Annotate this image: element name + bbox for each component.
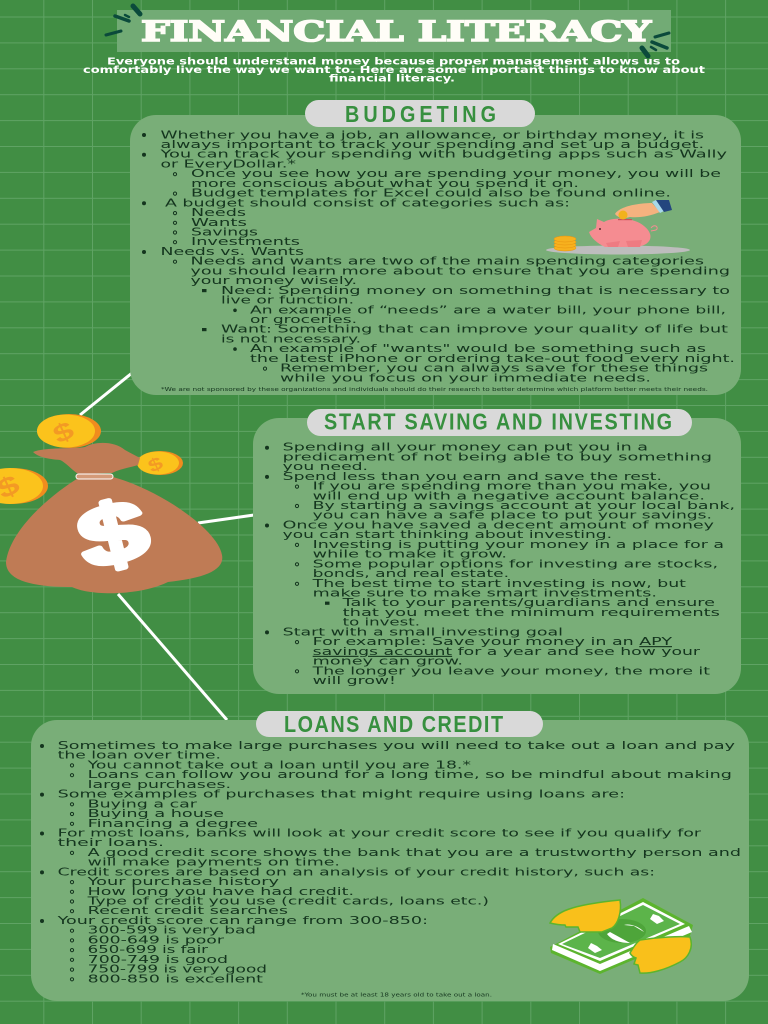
budgeting text: your money wisely.	[190, 274, 357, 287]
bag tie	[76, 474, 113, 479]
saving text: The longer you leave your money, the more it	[311, 664, 711, 677]
loans text: 650-699 is fair	[88, 943, 209, 956]
budgeting text: more conscious about what you spend it on.	[191, 177, 579, 190]
budgeting text: you should learn more about to ensure that you are spending	[190, 264, 730, 277]
icon: money with wings	[550, 898, 693, 974]
intro text	[83, 56, 706, 84]
saving text: you need.	[283, 460, 368, 473]
title banner: FINANCIAL LITERACY	[141, 15, 652, 48]
saving text: The best time to start investing is now, but	[311, 577, 687, 590]
budgeting footnote: *We are not sponsored by these organizations and individuals should do their research to better determine which platform better meets their needs.	[161, 387, 709, 393]
saving text: you can have a safe place to put your savings.	[313, 509, 712, 522]
saving text: that you meet the minimum requirements	[343, 606, 720, 619]
loans text	[56, 739, 741, 985]
bag top	[33, 443, 140, 474]
loans text: their loans.	[58, 836, 164, 849]
saving text: By starting a savings account at your local bank,	[313, 499, 735, 512]
loans text: You cannot take out a loan until you are 18.*	[86, 758, 472, 771]
loans text: 300-599 is very bad	[88, 924, 256, 937]
saving text: will grow!	[313, 674, 396, 687]
loans text: Buying a car	[88, 797, 198, 810]
loans text: Type of credit you use (credit cards, loans etc.)	[86, 894, 489, 908]
budgeting bullet markers	[142, 133, 267, 370]
coin top	[37, 414, 101, 449]
panel: start saving and investing	[253, 418, 741, 694]
saving text: Some popular options for investing are stocks,	[313, 557, 718, 570]
saving text: Spending all your money can put you in a	[283, 441, 648, 454]
intro text: comfortably live the way we want to. Here are some important things to know about	[83, 65, 706, 76]
intro text: Everyone should understand money because proper management allows us to	[107, 56, 681, 68]
loans text: Recent credit searches	[88, 904, 288, 917]
loans text: For most loans, banks will look at your credit score to see if you qualify for	[58, 826, 702, 840]
budgeting text: Investments	[191, 235, 300, 248]
saving text	[283, 441, 735, 687]
coin right	[137, 451, 183, 477]
loans text: A good credit score shows the bank that you are a trustworthy person and	[88, 846, 741, 859]
saving text: Start with a small investing goal	[283, 625, 563, 638]
loans text: large purchases.	[88, 778, 231, 791]
loans text: 750-799 is very good	[88, 963, 267, 976]
saving text: bonds, and real estate.	[313, 567, 509, 580]
saving text: Spend less than you earn and save the rest.	[283, 470, 662, 483]
heading: start saving and investing: START SAVING AND INVESTING	[324, 409, 672, 435]
saving text: savings account for a year and see how your	[313, 645, 701, 658]
budgeting text: Wants	[191, 216, 247, 229]
budgeting text: You can track your spending with budgeting apps such as Wally	[159, 148, 728, 161]
saving text: will end up with a negative account balance.	[313, 489, 705, 502]
title banner	[117, 10, 671, 52]
intro text: financial literacy.	[329, 74, 455, 84]
saving text: money can grow.	[313, 654, 463, 668]
budgeting text: A budget should consist of categories such as:	[165, 196, 570, 209]
panel: loans and credit	[31, 720, 749, 1001]
budgeting text: Whether you have a job, an allowance, or birthday money, it is	[160, 128, 704, 141]
loans text: will make payments on time.	[88, 856, 340, 869]
saving text: For example: Save your money in an APY	[313, 635, 672, 648]
budgeting text: Remember, you can always save for these things	[280, 362, 708, 375]
saving bullet markers	[265, 446, 330, 673]
budgeting text	[159, 128, 735, 384]
budgeting text: An example of "wants" would be something such as	[250, 342, 706, 355]
loans text: Your credit score can range from 300-850:	[56, 914, 428, 927]
budgeting text: or EveryDollar.*	[160, 158, 297, 170]
coin right: $	[145, 452, 166, 477]
coin top: $	[49, 416, 78, 449]
budgeting text: An example of “needs” are a water bill, your phone bill,	[250, 303, 726, 316]
loans text: How long you have had credit.	[88, 885, 354, 898]
heading: budgeting	[305, 100, 535, 127]
budgeting text: Needs	[191, 206, 246, 219]
loans text: Credit scores are based on an analysis of your credit history, such as:	[58, 865, 655, 878]
loans text: the loan over time.	[58, 749, 221, 762]
heading: loans and credit: LOANS AND CREDIT	[284, 712, 503, 737]
icon: sparkles bottom right	[642, 33, 669, 56]
budgeting text: Budget templates for Excel could also be found online.	[191, 187, 671, 200]
budgeting text: is not necessary.	[221, 332, 361, 345]
saving text: Once you have saved a decent amount of money	[283, 518, 715, 532]
budgeting text: the latest iPhone or ordering take-out food every night.	[250, 352, 735, 365]
loans footnote: *You must be at least 18 years old to take out a loan.	[301, 992, 493, 998]
budgeting text: Once you see how you are spending your money, you will be	[191, 167, 721, 180]
icon: sparkles top left	[106, 6, 140, 35]
loans text: 800-850 is excellent	[88, 972, 264, 985]
loans bullet markers	[40, 744, 74, 981]
saving text: to invest.	[343, 616, 420, 629]
budgeting text: Needs and wants are two of the main spending categories	[190, 255, 704, 268]
loans text: 600-649 is poor	[88, 933, 225, 946]
saving text: while to make it grow.	[313, 548, 507, 561]
icon: piggy bank	[546, 200, 690, 254]
loans text: Sometimes to make large purchases you will need to take out a loan and pay	[58, 739, 736, 752]
budgeting text: Needs vs. Wants	[160, 245, 304, 258]
heading: budgeting: BUDGETING	[345, 102, 496, 127]
budgeting text: Want: Something that can improve your quality of life but	[221, 323, 729, 336]
budgeting text: Need: Spending money on something that is necessary to	[221, 284, 730, 297]
budgeting text: or groceries.	[250, 313, 357, 326]
bag body	[6, 477, 222, 593]
loans text: Some examples of purchases that might require using loans are:	[58, 788, 625, 801]
dollar sign: $	[69, 481, 157, 588]
saving text: Talk to your parents/guardians and ensure	[341, 596, 715, 609]
loans text: Financing a degree	[88, 817, 258, 830]
saving text: you can start thinking about investing.	[283, 528, 612, 541]
budgeting text: while you focus on your immediate needs.	[280, 371, 651, 384]
saving text: predicament of not being able to buy something	[283, 450, 712, 463]
budgeting text: live or function.	[221, 294, 354, 306]
icon: money bag with coins	[0, 414, 222, 593]
loans text: Loans can follow you around for a long time, so be mindful about making	[88, 768, 732, 781]
coin left	[0, 468, 48, 505]
loans text: Buying a house	[88, 807, 224, 820]
saving text: make sure to make smart investments.	[313, 586, 657, 600]
budgeting text: always important to track your spending and set up a budget.	[160, 138, 704, 151]
loans text: Your purchase history	[86, 875, 280, 888]
connector lines	[80, 373, 254, 720]
budgeting text: Savings	[191, 226, 258, 238]
saving text: If you are spending more than you make, you	[313, 480, 711, 493]
saving text: Investing is putting your money in a place for a	[313, 538, 724, 551]
panel: budgeting	[130, 115, 741, 395]
loans text: 700-749 is good	[88, 953, 228, 966]
